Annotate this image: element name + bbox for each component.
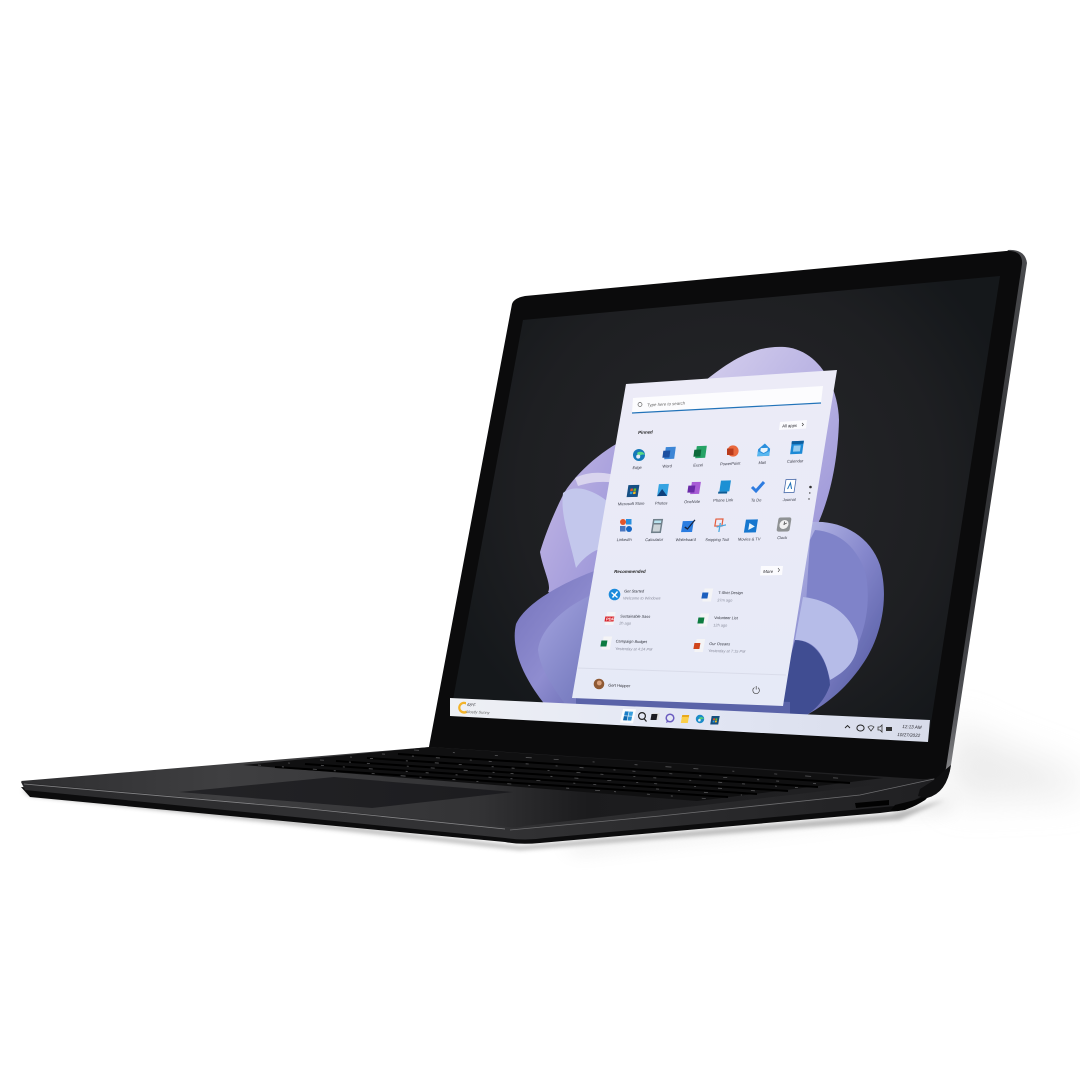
deck xyxy=(21,747,935,832)
lid bezel xyxy=(428,251,1022,791)
widget: weather: Mostly Sunny xyxy=(466,709,490,715)
app: Excel: Excel xyxy=(693,462,704,468)
app: To Do xyxy=(751,482,764,503)
button: more xyxy=(760,566,783,576)
recommended: Our Oceans: Yesterday at 7:15 PM xyxy=(708,648,746,654)
shadow under laptop xyxy=(22,720,1080,854)
recommended: Sustainable Sass: Sustainable Sass xyxy=(620,614,651,619)
clock: 10/27/2022 xyxy=(897,732,921,738)
button: all apps xyxy=(779,420,807,430)
app: LinkedIn: LinkedIn xyxy=(616,537,632,542)
clock: 12:13 AM xyxy=(902,724,922,730)
heading: recommended: Recommended xyxy=(614,569,646,574)
search bar xyxy=(632,386,823,413)
app: To Do: To Do xyxy=(751,497,763,503)
recommended: Sustainable Sass: PDF xyxy=(606,617,615,621)
system tray xyxy=(845,725,892,732)
app: OneNote: OneNote xyxy=(684,499,701,504)
user avatar xyxy=(594,679,631,689)
recommended: Volunteer List: Volunteer List xyxy=(714,615,739,620)
recommended: T-Shirt Design: T-Shirt Design xyxy=(718,590,743,595)
search bar: Type here to search xyxy=(647,400,686,408)
button: all apps: All apps xyxy=(782,423,797,428)
recommended: T-Shirt Design xyxy=(701,588,743,603)
app: Whiteboard xyxy=(675,520,696,542)
app: Microsoft Store: Microsoft Store xyxy=(617,501,646,506)
trackpad xyxy=(179,777,513,808)
recommended: Volunteer List xyxy=(697,614,739,628)
app: PowerPoint: PowerPoint xyxy=(720,461,742,466)
icon: power xyxy=(753,686,759,694)
icon: search xyxy=(639,713,646,722)
laptop lid xyxy=(428,250,1027,798)
app: Calculator: Calculator xyxy=(645,537,664,542)
app: Snipping Tool: Snipping Tool xyxy=(705,537,730,542)
display background xyxy=(450,276,1000,742)
recommended: Campaign Budget xyxy=(600,636,653,652)
app: Snipping Tool xyxy=(705,519,730,542)
taskbar xyxy=(450,698,930,742)
lobe: right xyxy=(791,522,884,714)
recommended: Campaign Budget: Yesterday at 4:24 PM xyxy=(615,646,653,652)
ribbon: curl xyxy=(562,488,606,568)
app: Calendar: Calendar xyxy=(787,458,804,464)
hinge and foot xyxy=(890,790,935,811)
highlight line: front right xyxy=(510,779,934,830)
recommended: Campaign Budget: Campaign Budget xyxy=(615,639,648,644)
ribbon: left xyxy=(540,438,628,625)
widget: weather: 68°F xyxy=(467,702,477,707)
card slot xyxy=(855,800,889,808)
start menu xyxy=(572,370,837,706)
recommended: Our Oceans xyxy=(693,639,746,654)
clock xyxy=(897,724,922,738)
wallpaper bloom xyxy=(515,347,884,725)
recommended: Get Started xyxy=(609,589,661,600)
icon: explorer xyxy=(681,715,689,723)
app: Whiteboard: Whiteboard xyxy=(675,537,696,542)
icon: edge xyxy=(696,715,704,723)
carousel dots xyxy=(808,486,812,500)
app: LinkedIn xyxy=(616,519,632,542)
icon: store xyxy=(710,716,720,724)
highlight line: front left xyxy=(24,784,505,829)
lobe strip under menu xyxy=(576,698,790,714)
front edge xyxy=(21,778,935,840)
icon: task view xyxy=(650,713,660,720)
keyboard xyxy=(243,747,883,801)
app: Phone Link: Phone Link xyxy=(713,497,735,503)
user avatar: Gert Hopper xyxy=(608,683,631,688)
app: Photos: Photos xyxy=(655,500,668,506)
app: Mail: Mail xyxy=(758,460,766,465)
button: more: More xyxy=(763,569,774,574)
app: Movies & TV xyxy=(738,519,761,542)
app: Clock xyxy=(776,517,792,540)
app: Phone Link xyxy=(713,480,735,503)
app: OneNote xyxy=(684,482,701,504)
fold: right xyxy=(795,597,858,680)
menu panel xyxy=(572,370,837,706)
recommended: Sustainable Sass: 2h ago xyxy=(619,621,632,626)
app: Photos xyxy=(655,484,669,506)
app: PowerPoint xyxy=(720,445,742,466)
recommended: Our Oceans: Our Oceans xyxy=(709,641,731,646)
app: Journal: Journal xyxy=(782,497,796,502)
app: Edge: Edge xyxy=(632,465,643,470)
lobe: lower left xyxy=(514,571,594,704)
app: Calendar xyxy=(787,441,804,464)
app: Word xyxy=(662,447,676,469)
recommended: Volunteer List: 12h ago xyxy=(713,623,729,628)
recommended: Get Started: Welcome to Windows xyxy=(623,596,661,600)
petal: top xyxy=(700,347,839,530)
icon: start xyxy=(620,709,636,723)
app: Journal xyxy=(782,479,796,502)
app: Movies & TV: Movies & TV xyxy=(738,536,761,542)
app: Edge xyxy=(632,449,645,470)
lid metal edge xyxy=(900,250,1027,798)
recommended: T-Shirt Design: 37m ago xyxy=(717,598,734,603)
recommended: Sustainable Sass xyxy=(604,612,651,626)
recommended: Get Started: Get Started xyxy=(624,589,645,593)
heading: pinned: Pinned xyxy=(638,429,653,435)
base underside xyxy=(21,785,935,844)
app: Clock: Clock xyxy=(777,535,789,540)
lid bottom corner xyxy=(918,765,951,798)
app: Mail xyxy=(757,443,771,465)
widget: weather xyxy=(458,702,490,715)
app: Word: Word xyxy=(662,463,672,469)
laptop base xyxy=(21,747,935,844)
icon: chat xyxy=(666,714,674,723)
app: Microsoft Store xyxy=(617,485,646,506)
app: Calculator xyxy=(645,519,664,542)
app: Excel xyxy=(693,446,707,468)
